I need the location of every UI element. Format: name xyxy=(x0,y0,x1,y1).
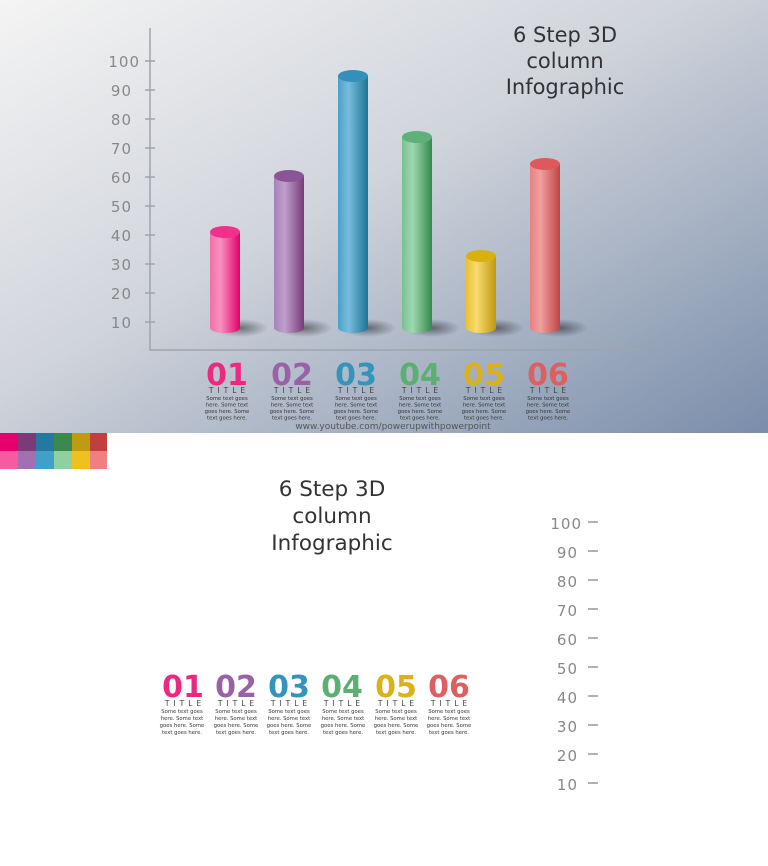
axis lower: 30 xyxy=(557,718,578,736)
axis xyxy=(145,28,648,350)
step labels lower: goes here. Some xyxy=(267,723,311,729)
axis lower: 80 xyxy=(557,573,578,591)
step labels lower: here. Some text xyxy=(215,716,257,722)
step labels top: Some text goes xyxy=(335,396,377,402)
step labels lower: goes here. Some xyxy=(427,723,471,729)
step labels top: Some text goes xyxy=(527,396,569,402)
step labels top: 05 xyxy=(463,358,505,393)
step labels lower: TITLE xyxy=(270,699,311,708)
step labels top: goes here. Some xyxy=(270,409,314,415)
step labels lower: 02 xyxy=(215,670,257,705)
step labels top: Some text goes xyxy=(463,396,505,402)
axis labels xyxy=(108,53,140,332)
step labels top: goes here. Some xyxy=(334,409,378,415)
step labels lower: TITLE xyxy=(217,699,258,708)
step labels top: TITLE xyxy=(208,386,249,395)
title lower: 6 Step 3D xyxy=(279,477,385,502)
step labels lower: text goes here. xyxy=(323,730,363,736)
step labels lower: text goes here. xyxy=(216,730,256,736)
step labels lower: 03 xyxy=(268,670,310,705)
step labels lower: here. Some text xyxy=(322,716,364,722)
step labels top: text goes here. xyxy=(400,416,440,422)
step labels lower: text goes here. xyxy=(162,730,202,736)
step labels top: here. Some text xyxy=(463,402,505,408)
axis lower: 50 xyxy=(557,660,578,678)
step labels top: goes here. Some xyxy=(398,409,442,415)
step labels top: 01 xyxy=(206,358,248,393)
step labels top: Some text goes xyxy=(206,396,248,402)
step labels top: here. Some text xyxy=(206,402,248,408)
step labels top: text goes here. xyxy=(464,416,504,422)
step labels top: text goes here. xyxy=(336,416,376,422)
step labels lower: 05 xyxy=(375,670,417,705)
step labels top: goes here. Some xyxy=(205,409,249,415)
axis labels: 60 xyxy=(111,169,132,187)
step labels lower: Some text goes xyxy=(322,709,364,715)
step labels top: TITLE xyxy=(529,386,570,395)
step labels top: Some text goes xyxy=(271,396,313,402)
step labels top xyxy=(205,358,570,432)
axis lower: 90 xyxy=(557,544,578,562)
axis lower: 40 xyxy=(557,689,578,707)
axis lower xyxy=(550,515,598,794)
title lower: Infographic xyxy=(271,531,393,556)
step labels top: text goes here. xyxy=(207,416,247,422)
step labels top: here. Some text xyxy=(399,402,441,408)
axis labels: 10 xyxy=(111,314,132,332)
axis labels: 20 xyxy=(111,285,132,303)
step labels top: text goes here. xyxy=(528,416,568,422)
step labels lower: text goes here. xyxy=(429,730,469,736)
step labels top: 04 xyxy=(399,358,441,393)
step labels top: 06 xyxy=(527,358,569,393)
axis lower: 60 xyxy=(557,631,578,649)
step labels lower: Some text goes xyxy=(375,709,417,715)
title lower: column xyxy=(292,504,372,529)
axis labels: 80 xyxy=(111,111,132,129)
step labels lower xyxy=(160,670,471,736)
cylinders xyxy=(210,70,588,337)
title: 6 Step 3D xyxy=(513,23,617,47)
url: www.youtube.com/powerupwithpowerpoint xyxy=(295,422,491,432)
color swatches xyxy=(0,433,107,469)
step labels lower: Some text goes xyxy=(215,709,257,715)
step labels top: 03 xyxy=(335,358,377,393)
step labels lower: 04 xyxy=(321,670,363,705)
step labels lower: here. Some text xyxy=(268,716,310,722)
axis labels: 30 xyxy=(111,256,132,274)
step labels top: here. Some text xyxy=(335,402,377,408)
panel: top chart xyxy=(0,0,768,433)
step labels lower: TITLE xyxy=(377,699,418,708)
step labels lower: text goes here. xyxy=(376,730,416,736)
step labels lower: here. Some text xyxy=(428,716,470,722)
step labels lower: here. Some text xyxy=(375,716,417,722)
step labels lower: TITLE xyxy=(164,699,205,708)
step labels lower: Some text goes xyxy=(428,709,470,715)
title: Infographic xyxy=(506,75,624,99)
axis labels: 50 xyxy=(111,198,132,216)
step labels top: TITLE xyxy=(273,386,314,395)
step labels lower: TITLE xyxy=(323,699,364,708)
step labels top: TITLE xyxy=(337,386,378,395)
step labels top: text goes here. xyxy=(272,416,312,422)
step labels top: goes here. Some xyxy=(462,409,506,415)
step labels lower: goes here. Some xyxy=(374,723,418,729)
step labels lower: here. Some text xyxy=(161,716,203,722)
axis lower: 20 xyxy=(557,747,578,765)
step labels lower: Some text goes xyxy=(161,709,203,715)
step labels lower: text goes here. xyxy=(269,730,309,736)
step labels top: 02 xyxy=(271,358,313,393)
axis labels: 70 xyxy=(111,140,132,158)
step labels lower: goes here. Some xyxy=(160,723,204,729)
step labels lower: goes here. Some xyxy=(214,723,258,729)
step labels lower: Some text goes xyxy=(268,709,310,715)
step labels top: TITLE xyxy=(465,386,506,395)
step labels top: Some text goes xyxy=(399,396,441,402)
axis labels: 100 xyxy=(108,53,140,71)
axis lower: 70 xyxy=(557,602,578,620)
step labels lower: 01 xyxy=(162,670,204,705)
step labels top: TITLE xyxy=(401,386,442,395)
axis labels: 40 xyxy=(111,227,132,245)
title: column xyxy=(526,49,604,73)
axis lower: 100 xyxy=(550,515,582,533)
step labels top: here. Some text xyxy=(271,402,313,408)
axis lower: 10 xyxy=(557,776,578,794)
axis labels: 90 xyxy=(111,82,132,100)
step labels top: here. Some text xyxy=(527,402,569,408)
step labels top: goes here. Some xyxy=(526,409,570,415)
step labels lower: TITLE xyxy=(430,699,471,708)
step labels lower: 06 xyxy=(428,670,470,705)
step labels lower: goes here. Some xyxy=(321,723,365,729)
